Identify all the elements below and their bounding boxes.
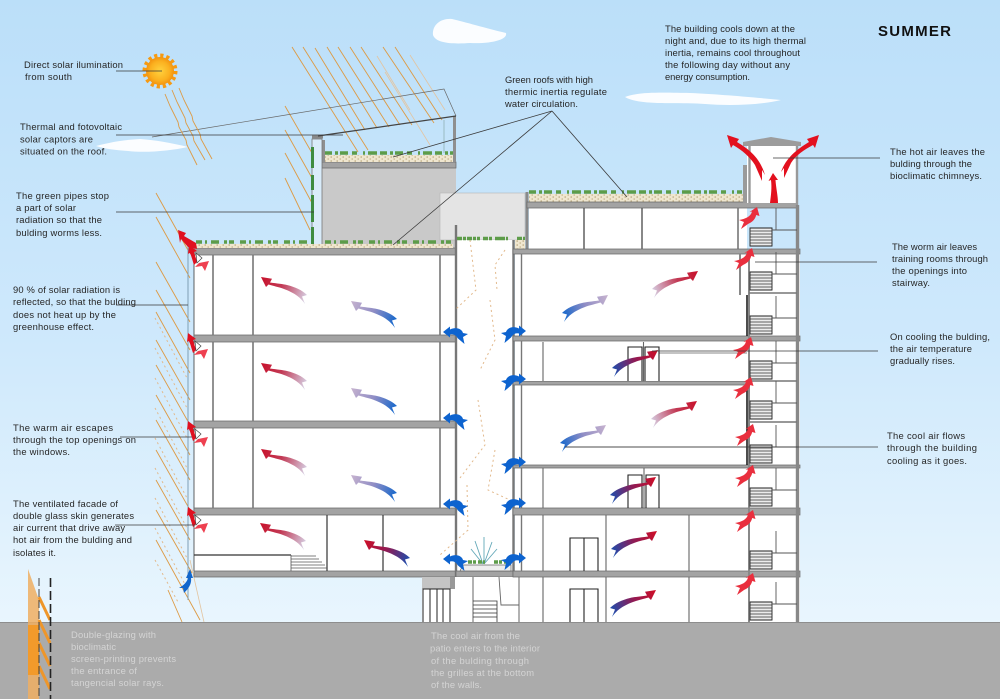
text: cool air flows [887,430,977,466]
text: ventilated facade [13,498,134,558]
text: ventilated facade: double glass skin generates [13,510,134,521]
text: solar radiation reflected: 90 % of solar radiation is [13,284,120,295]
text: air temperature rises: On cooling the bulding, [890,331,990,342]
text: cool air flows: cooling as it goes. [887,455,967,466]
text: green pipes: a part of solar [16,202,76,213]
text: night cooling: inertia, remains cool throughout [665,47,800,58]
text: direct solar illumination: from south [25,71,72,82]
text: hot air chimneys: The hot air leaves the [890,146,985,157]
text: air temperature rises [890,331,990,366]
text: worm air stairway: The worm air leaves [892,241,977,252]
patio cool air arrows: right [501,326,526,570]
upper roof block with green roof [322,116,456,248]
text: worm air stairway [892,241,988,288]
upper patio screen block [440,193,525,240]
text: green roofs: thermic inertia regulate [505,86,607,97]
blue air intake arrow at facade base [179,569,193,593]
sun rays [165,88,212,165]
ground line [0,622,1000,624]
stair tower stairs [750,208,797,620]
clouds [96,19,781,152]
solar rays over the roof and south face [155,47,445,622]
text: night cooling: energy consumption. [665,71,750,82]
text: green pipes: The green pipes stop [16,190,109,201]
text: double glazing: screen-printing prevents [71,653,176,664]
text: direct solar illumination [24,59,123,82]
text: warm air: the windows. [13,446,70,457]
text: worm air stairway: training rooms through [892,253,988,264]
text: cool air flows: through the building [887,442,977,453]
leader lines [115,71,880,525]
sun [145,56,175,86]
text: warm air: through the top openings on [13,434,136,445]
fountain and patio planting [460,537,511,571]
text: green pipes: bulding worms less. [16,227,102,238]
ventilated double skin facade [187,243,189,600]
text: solar captors: situated on the roof. [20,146,107,156]
text: air temperature rises: the air temperature [890,343,972,354]
text: double glazing: bioclimatic [71,641,116,652]
text: ventilated facade: air current that drive away [13,522,125,533]
bioclimatic chimney [743,137,801,205]
text: green pipes [16,190,109,238]
chimney hot air arrows [727,135,819,203]
text: solar captors: solar captors are [20,134,93,144]
text: double glazing: tangencial solar rays. [71,677,164,688]
text: direct solar illumination: Direct solar ilumination [24,59,123,70]
right wing lower floors [422,205,800,622]
text: cool air from patio: of the walls. [431,679,482,690]
text: warm air [13,422,136,457]
text: ventilated facade: isolates it. [13,547,56,558]
title: summer: SUMMER [878,23,951,40]
text: double glazing [71,629,176,688]
text: cool air from patio: of the bulding through [431,655,529,666]
hot air arrows into stair tower [733,207,760,595]
text: double glazing: Double-glazing with [71,629,156,640]
right wing upper floor and green roof [527,192,797,250]
green pipes column [312,137,323,248]
text: ventilated facade: hot air from the bulding and [13,534,132,545]
central patio [440,225,525,577]
left wing rooms [194,242,456,577]
text: solar captors: Thermal and fotovoltaic [20,121,122,132]
room air arrows: right wing [560,271,698,617]
text: solar radiation reflected: reflected, so that the bulding [13,296,136,307]
facade exhaust arrows [178,230,209,533]
text: solar captors [20,121,122,156]
text: green roofs: water circulation. [504,98,578,109]
text: night cooling: The building cools down at the [665,23,795,34]
lifts [570,347,659,622]
text: ventilated facade: The ventilated facade of [13,498,118,509]
text: hot air chimneys [890,146,985,181]
text: green pipes: radiation so that the [16,214,102,225]
text: cool air from patio: the grilles at the bottom [431,667,534,678]
text: warm air: The warm air escapes [13,422,113,433]
text: worm air stairway: stairway. [892,277,930,288]
double glazing screen detail [28,569,50,699]
text: cool air from patio: patio enters to the interior [430,642,540,654]
text: air temperature rises: gradually rises. [890,355,955,366]
text: green roofs [504,74,607,109]
text: double glazing: the entrance of [71,665,137,676]
text: night cooling: the following day without any [665,59,790,70]
text: night cooling: night and, due to its high thermal [665,35,806,46]
text: hot air chimneys: bioclimatic chimneys. [890,170,982,181]
text: worm air stairway: the openings into [892,265,967,276]
text: green roofs: Green roofs with high [505,74,593,85]
text: cool air from patio [430,630,540,690]
ground [0,623,1000,699]
text: night cooling [665,23,806,82]
text: hot air chimneys: bulding through the [890,158,972,169]
room air arrows: left wing [260,277,410,567]
solar captors on the roof [152,89,456,153]
text: cool air from patio: The cool air from the [431,630,520,641]
patio cool air arrows: left [443,326,468,571]
text: solar radiation reflected [13,284,136,332]
basement entrance and stairs [422,577,519,622]
text: cool air flows: The cool air flows [887,430,965,441]
text: solar radiation reflected: does not heat up by the [13,309,116,320]
text: solar radiation reflected: greenhouse effect. [13,321,94,332]
